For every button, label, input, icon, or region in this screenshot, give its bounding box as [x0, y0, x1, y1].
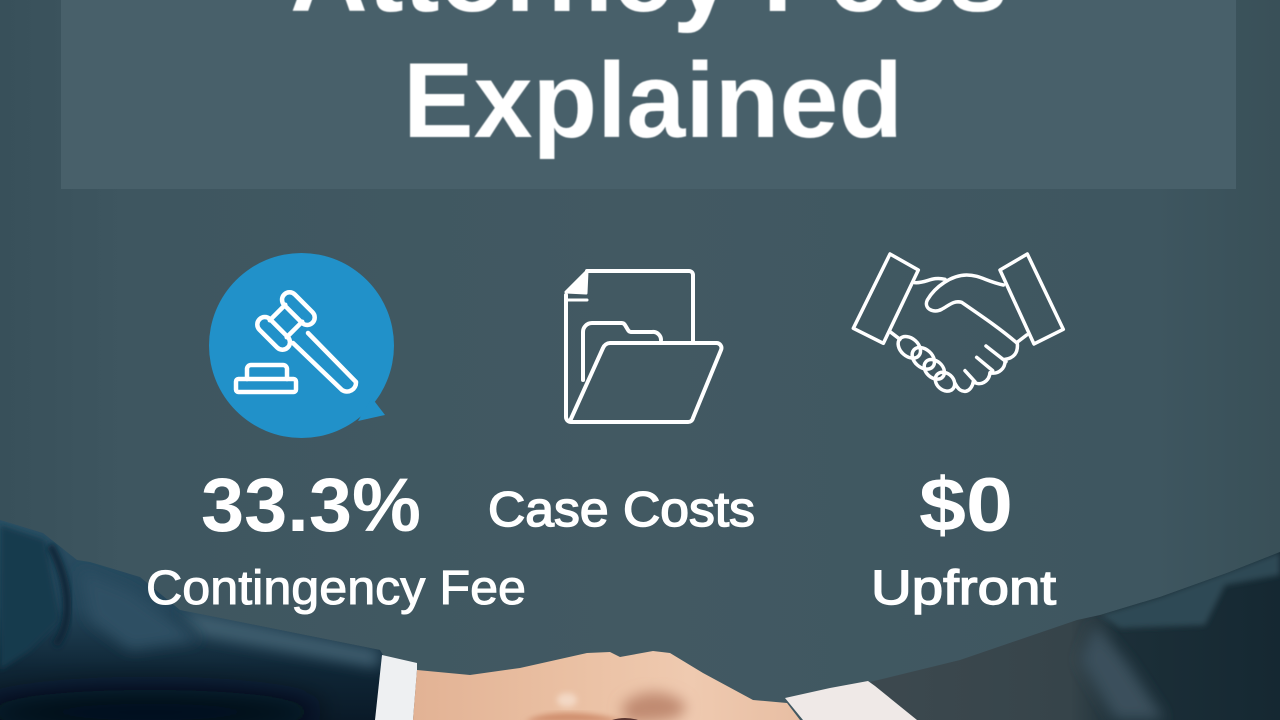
title — [290, 0, 1008, 160]
label: Contingency Fee: Contingency Fee — [146, 562, 526, 615]
photo: right suit sleeve — [860, 545, 1280, 720]
photo: left suit sleeve — [0, 515, 390, 720]
photo: left shirt cuff — [375, 655, 417, 720]
gavel handle — [293, 333, 356, 392]
stat: 33.3%: 33.3% — [201, 463, 421, 548]
icon: gavel in blue speech bubble — [209, 253, 394, 438]
gavel base — [236, 379, 296, 392]
label: Case Costs: Case Costs — [488, 483, 755, 537]
title banner — [61, 0, 1236, 189]
photo: right shirt cuff — [785, 681, 917, 720]
title: Explained — [403, 40, 903, 160]
label: Upfront: Upfront — [871, 562, 1056, 615]
icon: document and folder — [566, 271, 721, 422]
photo: clasped hands — [413, 651, 800, 720]
gavel head — [254, 289, 318, 353]
stat: $0: $0 — [919, 463, 1013, 548]
icon: handshake outline — [853, 254, 1063, 395]
